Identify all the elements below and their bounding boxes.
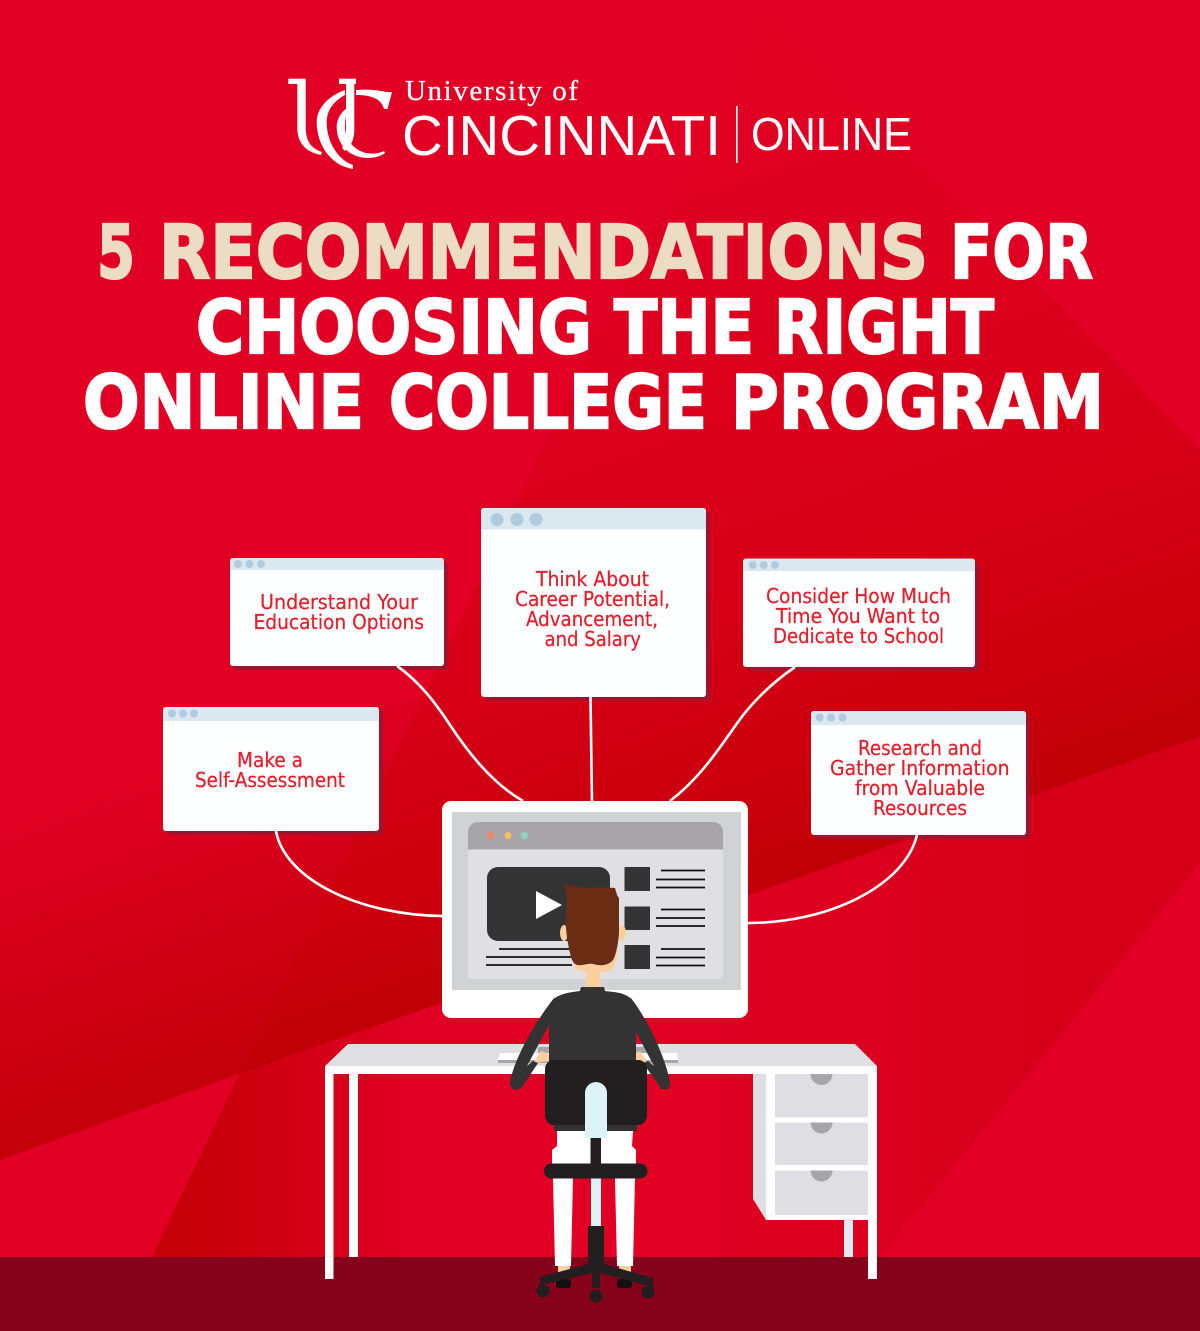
panel: think about career potential: Think About [535, 567, 649, 591]
panel: research and gather information: Resources [873, 796, 967, 820]
chair [536, 1060, 654, 1302]
connector lines [276, 666, 917, 923]
logo: University of Cincinnati Online [288, 75, 912, 169]
title: FOR [950, 210, 1093, 296]
drawers [775, 1074, 868, 1215]
panel: understand your education options: Understand Your [260, 590, 419, 614]
white trousers [552, 1131, 636, 1266]
panel: make a self-assessment: Make a [237, 748, 303, 772]
ankles and shoes [556, 1266, 632, 1288]
logo text: University of: University of [405, 75, 578, 107]
video player [487, 867, 610, 941]
person seated at desk [510, 884, 670, 1302]
title: 5 [97, 210, 135, 296]
right arm [630, 997, 670, 1090]
panel: think about career potential: Advancement, [526, 607, 658, 631]
logo text: Online: ONLINE [751, 108, 912, 160]
browser window on screen [468, 822, 723, 979]
panel: research and gather information: Gather Information [830, 756, 1010, 780]
panel: research and gather information: from Valuable [855, 776, 985, 800]
floor [0, 1257, 1200, 1331]
logo text: Cincinnati: CINCINNATI [402, 104, 721, 168]
panel: consider how much time: Dedicate to School [773, 624, 944, 648]
chair base with wheels [536, 1263, 654, 1302]
title: PROGRAM [731, 360, 1104, 446]
title: ONLINE [83, 360, 364, 446]
icon: UC monogram [288, 79, 392, 169]
panel: understand your education options [230, 558, 448, 670]
left arm [510, 997, 555, 1090]
panel: consider how much time: Consider How Much [766, 584, 951, 608]
panel: think about career potential [481, 508, 710, 701]
panel: make a self-assessment: Self-Assessment [195, 768, 345, 792]
logo divider [736, 106, 738, 163]
panel: consider how much time: Time You Want to [775, 604, 940, 628]
title: RIGHT [774, 285, 994, 371]
desk [325, 1044, 877, 1279]
hands [533, 1051, 648, 1063]
ears and face [560, 925, 626, 990]
panel: think about career potential: Career Potential, [515, 587, 670, 611]
panel: research and gather information: Research and [858, 736, 982, 760]
title: CHOOSING [196, 285, 592, 371]
article thumbnails and text lines [486, 867, 705, 969]
panel: think about career potential: and Salary [544, 627, 641, 651]
title: COLLEGE [389, 360, 707, 446]
panel: consider how much time [743, 558, 979, 671]
monitor [442, 801, 748, 1018]
keyboard [498, 1047, 678, 1063]
panel: understand your education options: Education Options [254, 610, 424, 634]
hair [564, 884, 619, 965]
panel: make a self-assessment [163, 707, 383, 835]
sweater torso [549, 987, 636, 1064]
title: RECOMMENDATIONS [159, 210, 928, 296]
panel: research and gather information [811, 711, 1030, 839]
title: THE [614, 285, 754, 371]
title [83, 210, 1104, 446]
